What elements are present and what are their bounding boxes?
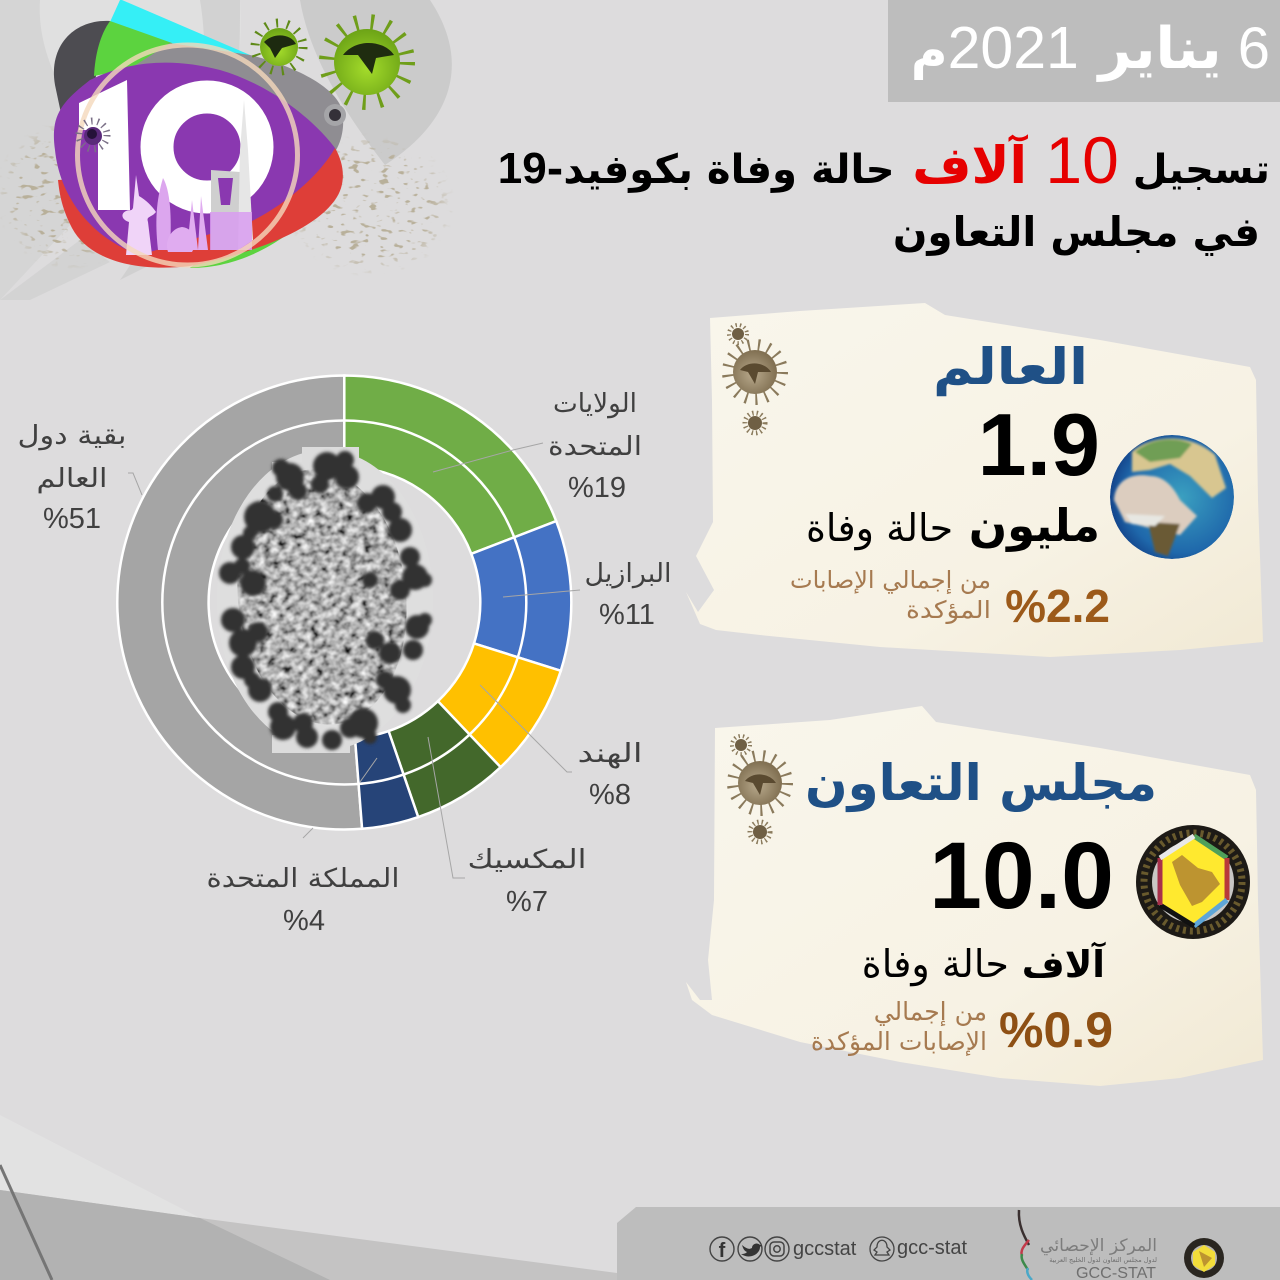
label: Mexico: المكسيك (468, 845, 586, 875)
value: 0.9%: %0.9 (999, 1002, 1113, 1058)
label: Brazil (584, 559, 672, 631)
segment: Brazil 11% (471, 521, 571, 671)
icon: GCC emblem small (1184, 1238, 1224, 1278)
value: 2.2%: %2.2 (1005, 580, 1110, 632)
title: في مجلس التعاون (893, 208, 1260, 256)
note: of total confirmed: الإصابات المؤكدة (811, 1027, 987, 1056)
segment: USA 19% (344, 376, 556, 554)
value: 1.9: 1.9 (978, 395, 1100, 494)
label: Brazil: البرازيل (584, 559, 672, 589)
icon: snapchat (870, 1237, 894, 1261)
icon: twitter (738, 1237, 762, 1261)
title: تسجيل 10 آلاف حالة وفاة بكوفيد-19 (498, 123, 1270, 197)
heading: GCC: مجلس التعاون (805, 754, 1157, 813)
text: thousand deaths: آلاف حالة وفاة (862, 941, 1106, 987)
doughnut chart (117, 376, 571, 830)
segment: Mexico 7% (389, 701, 501, 817)
label: rest of the world (18, 421, 126, 535)
label: USA (548, 389, 642, 504)
icon: green virus small (255, 23, 303, 71)
icon: dark virus (324, 104, 346, 126)
label: USA: المتحدة (548, 432, 642, 462)
label: rest of the world: بقية دول (18, 421, 126, 451)
icon: brown virus (728, 325, 782, 433)
icon: GCC emblem (1136, 825, 1250, 939)
debris behind logo (0, 120, 455, 277)
note: of total confirmed: من إجمالي الإصابات (790, 566, 991, 595)
handle: gcc-stat: gcc-stat (897, 1237, 967, 1259)
label: India: %8 (589, 779, 631, 811)
ring divider (162, 420, 526, 784)
panel: GCC (686, 706, 1263, 1086)
label: India: الهند (578, 739, 642, 769)
image: coronavirus (217, 447, 433, 753)
icon: facebook: f (719, 1240, 726, 1262)
icon: instagram (765, 1237, 789, 1261)
logo: number 10 with gulf skyline (54, 0, 343, 268)
label: Mexico (468, 845, 586, 918)
label: rest of the world: العالم (36, 464, 108, 494)
label: UK: %4 (283, 905, 325, 937)
footer (617, 1207, 1280, 1280)
note: of total confirmed: من إجمالي (874, 997, 987, 1027)
date banner: 6 يناير 2021م (911, 15, 1270, 82)
logo: GCC-STAT: المركز الإحصائي (1040, 1236, 1157, 1256)
label: UK (206, 864, 400, 937)
paper background (686, 706, 1263, 1086)
logo: GCC-STAT (1019, 1210, 1157, 1280)
background shapes top-left (0, 0, 452, 300)
label: rest of the world: %51 (43, 503, 101, 535)
note: of total confirmed: المؤكدة (906, 596, 991, 624)
logo: GCC-STAT: لدول مجلس التعاون لدول الخليج العربية (1049, 1256, 1157, 1264)
label: USA: الولايات (553, 389, 637, 419)
segment: India 8% (438, 643, 561, 767)
note: of total confirmed (790, 566, 991, 624)
text: million deaths: مليون حالة وفاة (806, 499, 1100, 552)
skyline (122, 100, 253, 255)
icon: green virus large (327, 22, 407, 102)
icon: purple virus (79, 121, 107, 149)
icon: brown virus (732, 736, 787, 842)
leader lines (128, 443, 580, 878)
segment: UK 4% (355, 731, 418, 829)
paper background (686, 303, 1263, 657)
icon: globe (1110, 435, 1234, 559)
label: India (578, 739, 642, 811)
date banner (888, 0, 1280, 102)
segment: rest of the world 51% (117, 376, 362, 830)
note: of total confirmed (811, 997, 987, 1056)
icon: facebook (710, 1237, 734, 1262)
label: Mexico: %7 (506, 886, 548, 918)
heading: world: العالم (933, 338, 1088, 396)
background lower-left band (0, 1115, 617, 1280)
value: 10.0: 10.0 (929, 823, 1114, 929)
label: USA: %19 (568, 472, 626, 504)
title (498, 123, 1270, 256)
label: Brazil: %11 (599, 599, 655, 631)
handle: gccstat: gccstat (793, 1238, 857, 1260)
label: UK: المملكة المتحدة (206, 864, 400, 894)
panel: world (686, 303, 1263, 657)
